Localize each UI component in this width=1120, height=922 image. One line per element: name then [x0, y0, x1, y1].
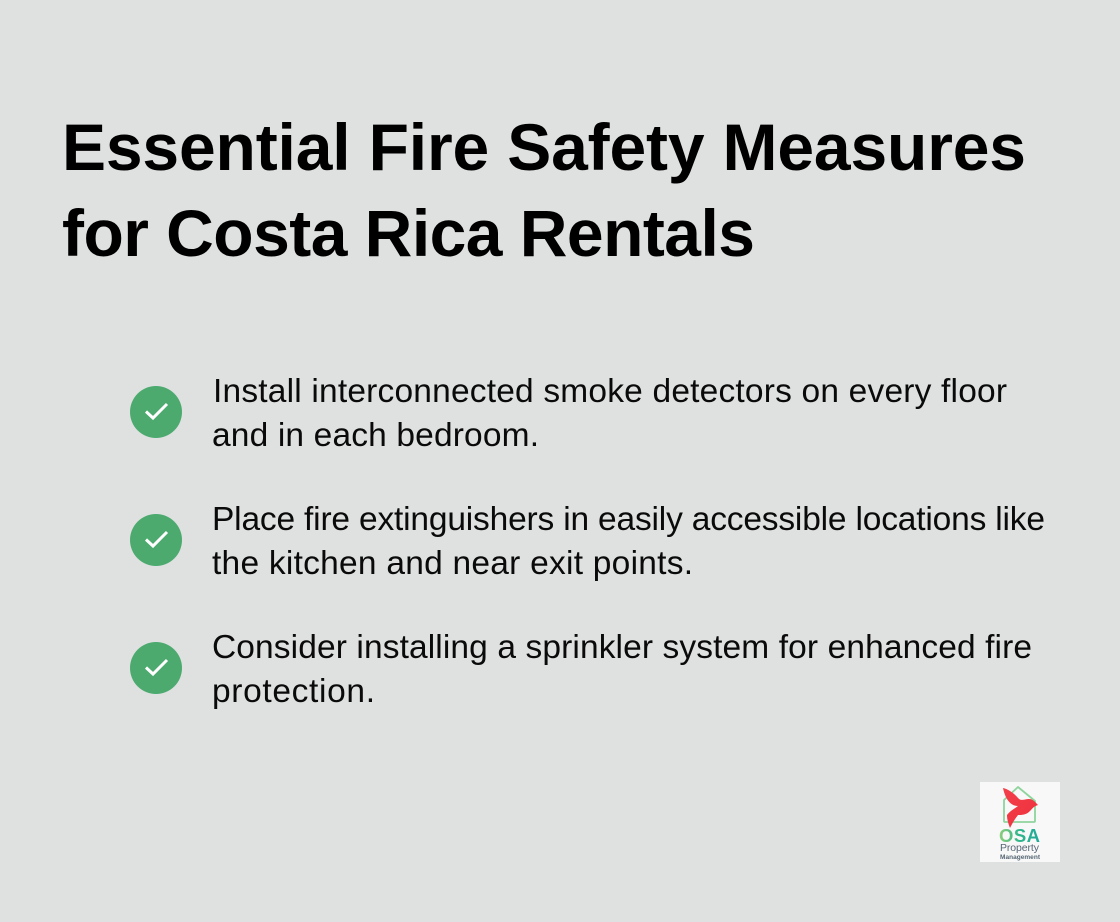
logo subtitle: Property	[1000, 842, 1040, 854]
logo subtitle 2: Management	[1000, 854, 1041, 861]
text: fire extinguishers: the kitchen and near exit points.	[212, 545, 693, 582]
text: fire extinguishers	[212, 501, 1045, 582]
text: smoke detectors: Install interconnected smoke detectors on every floor	[213, 373, 1007, 410]
text: smoke detectors: and in each bedroom.	[212, 417, 539, 454]
title: for Costa Rica Rentals	[62, 196, 755, 270]
icon: house outline	[1004, 787, 1035, 822]
item 2: fire extinguishers	[130, 501, 1045, 582]
title: Essential Fire Safety Measures	[62, 110, 1026, 184]
title	[62, 110, 1026, 270]
text: sprinkler system: protection.	[212, 673, 375, 710]
text: smoke detectors	[212, 373, 1007, 454]
text: sprinkler system	[212, 629, 1032, 710]
text: sprinkler system: Consider installing a sprinkler system for enhanced fire	[212, 629, 1032, 666]
logo: OSA Property Management	[980, 782, 1060, 862]
item 3: sprinkler system	[130, 629, 1032, 710]
icon: check 3	[130, 642, 182, 694]
checklist	[130, 373, 1045, 710]
icon: check 2	[130, 514, 182, 566]
icon: red bird	[1003, 788, 1038, 828]
item 1: smoke detectors	[130, 373, 1007, 454]
icon: check 1	[130, 386, 182, 438]
text: fire extinguishers: Place fire extinguishers in easily accessible locations like	[212, 501, 1045, 538]
logo wordmark: OSA	[999, 825, 1040, 846]
